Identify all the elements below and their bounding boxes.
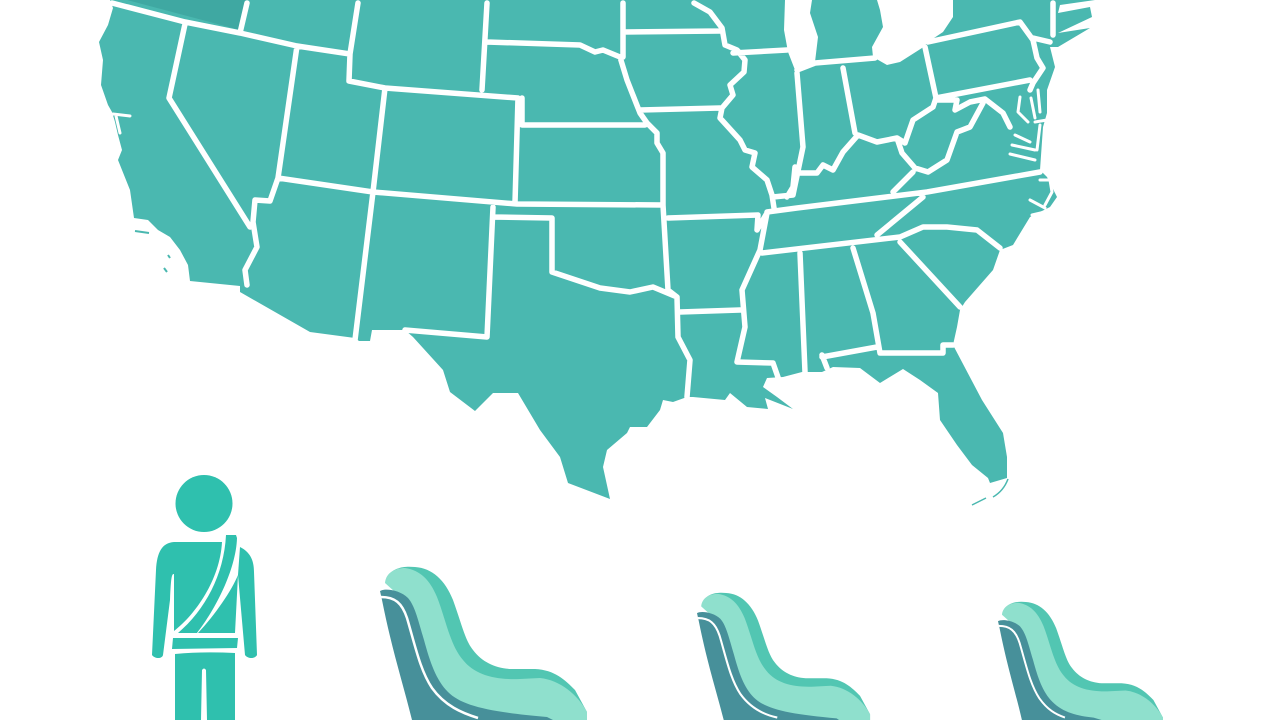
dark seat back bbox=[697, 612, 839, 720]
torso and left arm bbox=[152, 542, 222, 658]
dark seat back bbox=[380, 590, 553, 720]
florida keys bbox=[972, 479, 1008, 505]
seat shell bbox=[387, 567, 587, 720]
seat shell bbox=[703, 593, 870, 720]
right arm bbox=[238, 547, 257, 658]
california islands bbox=[135, 231, 170, 272]
lap belt bbox=[172, 638, 238, 649]
white piping bbox=[999, 626, 1065, 718]
seat shell bbox=[1004, 602, 1163, 720]
icon: large child car seat bbox=[380, 567, 587, 720]
lower torso bbox=[198, 575, 238, 633]
icon: small child car seat bbox=[998, 602, 1163, 720]
coast details bbox=[113, 90, 1052, 215]
white piping bbox=[381, 597, 478, 718]
icon: medium child car seat bbox=[697, 593, 870, 720]
map: contiguous United States bbox=[99, 0, 1095, 505]
head bbox=[176, 475, 232, 532]
white piping bbox=[698, 618, 777, 718]
state borders bbox=[112, 3, 1053, 397]
state: Oregon highlighted bbox=[127, 0, 247, 30]
seat cushion bbox=[1002, 603, 1163, 720]
shoulder sash bbox=[178, 535, 237, 633]
legs bbox=[175, 652, 235, 720]
icon: person wearing seat belt bbox=[152, 475, 257, 720]
land silhouette bbox=[99, 0, 1095, 499]
dark seat back bbox=[998, 620, 1102, 720]
seat cushion bbox=[385, 568, 587, 720]
seat cushion bbox=[701, 594, 870, 720]
